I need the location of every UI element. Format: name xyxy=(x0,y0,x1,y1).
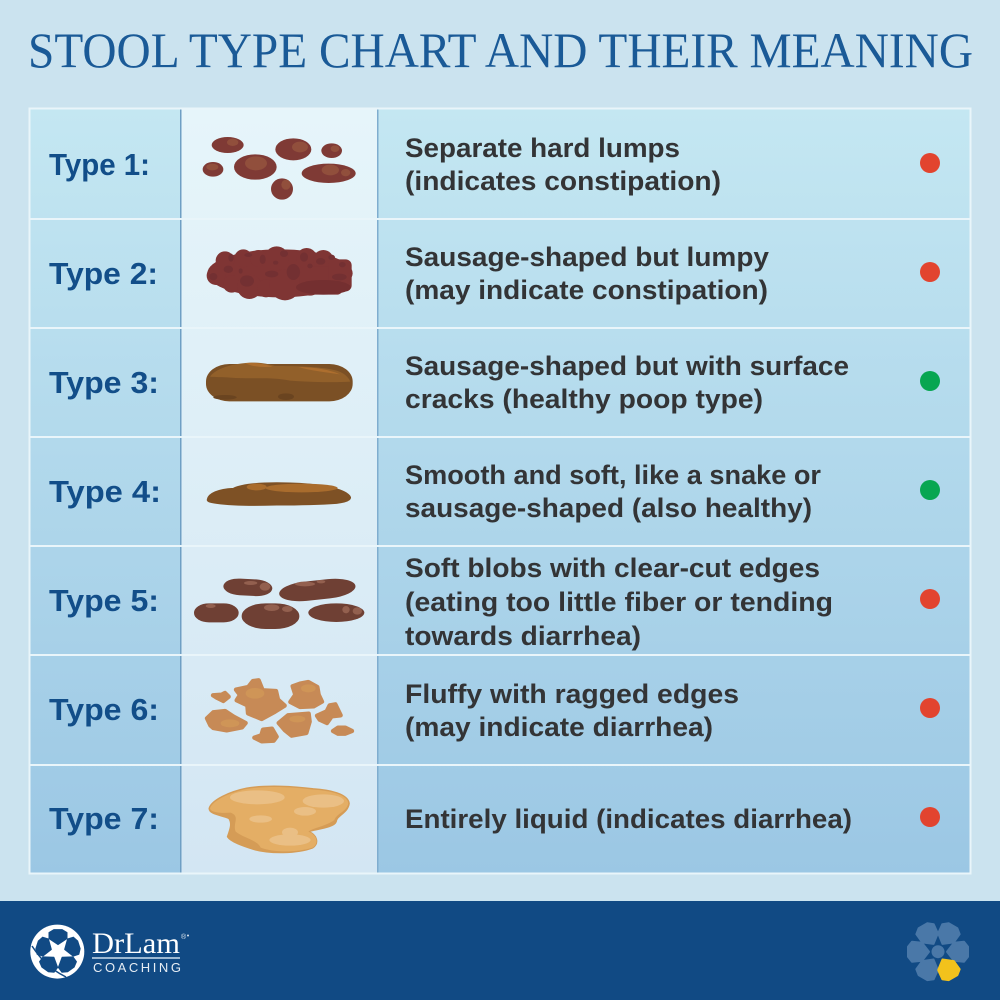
logo: DrLam Coaching: DrLam xyxy=(92,927,180,960)
logo: DrLam Coaching: ® xyxy=(181,933,187,941)
icon: flower mark xyxy=(908,921,968,983)
description text: Smooth and soft, like a snake or xyxy=(405,460,821,490)
description text: Fluffy with ragged edges xyxy=(405,679,739,709)
description text: (may indicate diarrhea) xyxy=(405,712,713,742)
title: STOOL TYPE CHART AND THEIR MEANING xyxy=(28,22,973,78)
illustration: type 4 smooth snake xyxy=(207,483,351,505)
description text: Soft blobs with clear-cut edges xyxy=(405,553,820,583)
logo: DrLam Coaching xyxy=(30,925,189,979)
description text: Entirely liquid (indicates diarrhea) xyxy=(405,804,852,834)
illustration: type 6 fluffy pieces xyxy=(207,680,352,741)
description text: (eating too little fiber or tending xyxy=(405,587,833,617)
description text: Separate hard lumps xyxy=(405,133,680,163)
type labels: Type 7: xyxy=(49,801,159,836)
description text: sausage-shaped (also healthy) xyxy=(405,493,812,523)
description text: (indicates constipation) xyxy=(405,166,721,196)
status indicator dots xyxy=(920,153,940,827)
logo: DrLam Coaching: COACHING xyxy=(93,960,181,975)
type labels: Type 5: xyxy=(49,583,159,618)
illustration: type 2 sausage with lumps xyxy=(207,246,353,300)
description text: (may indicate constipation) xyxy=(405,275,768,305)
description text: Sausage-shaped but lumpy xyxy=(405,242,769,272)
illustration: type 7 liquid puddle xyxy=(209,786,349,852)
description text: towards diarrhea) xyxy=(405,621,641,651)
type labels: Type 1: xyxy=(49,147,150,182)
illustration: type 1 lumps xyxy=(203,137,356,200)
type labels: Type 4: xyxy=(49,474,161,509)
illustration: type 3 sausage with cracks xyxy=(206,363,353,401)
type labels: Type 3: xyxy=(49,365,159,400)
description text xyxy=(405,133,852,834)
type labels: Type 2: xyxy=(49,256,158,291)
panel: chart table xyxy=(29,108,971,874)
type labels xyxy=(49,147,161,836)
illustration: type 5 soft blobs xyxy=(194,576,364,629)
description text: cracks (healthy poop type) xyxy=(405,384,763,414)
description text: Sausage-shaped but with surface xyxy=(405,351,849,381)
type labels: Type 6: xyxy=(49,692,159,727)
footer band xyxy=(0,901,1000,1000)
